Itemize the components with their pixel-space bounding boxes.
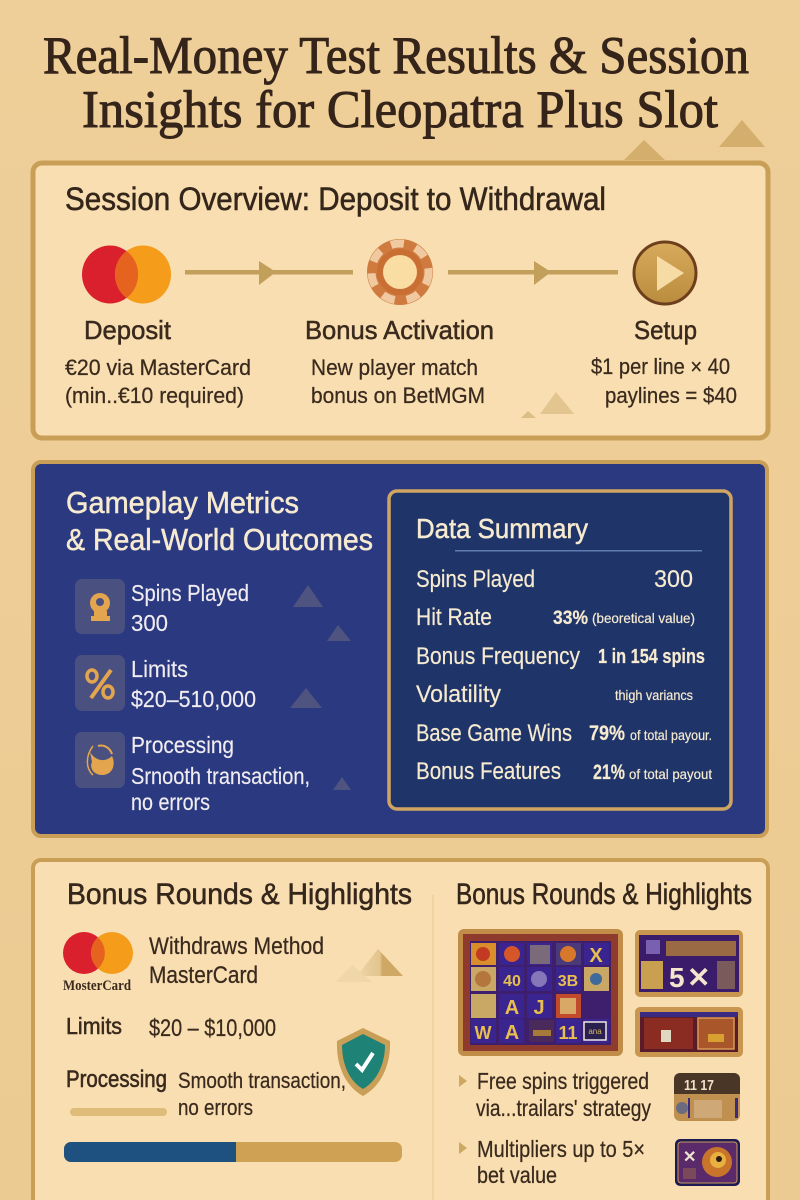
- row: hit rate: (beoretical value): [592, 610, 695, 626]
- icon: shield: [337, 1028, 390, 1096]
- panel: gameplay metrics: [33, 462, 767, 836]
- slot reels image: [458, 929, 623, 1056]
- metric: limits: Limits: [131, 656, 188, 682]
- heading: data summary: Data Summary: [416, 513, 588, 544]
- title: Insights for Cleopatra Plus Slot: [82, 81, 718, 139]
- slot reels image: 3B: [558, 973, 578, 990]
- progress bar: [64, 1142, 402, 1162]
- slot reels image: W: [474, 1023, 492, 1043]
- icon: gear: [75, 579, 125, 634]
- icon: mastercard withdrawal: [63, 932, 133, 994]
- heading: gameplay metrics: Gameplay Metrics: [66, 485, 299, 520]
- slot reels image: 40: [503, 973, 521, 990]
- multiplier thumbnail 5x: [635, 930, 743, 997]
- metric: processing: Processing: [131, 732, 234, 758]
- row: hit rate: [416, 604, 695, 631]
- row: volatility: [416, 681, 693, 708]
- heading: session overview: Session Overview: Deposit to Withdrawal: [65, 181, 606, 217]
- limits row: Limits: [66, 1013, 122, 1039]
- row: spins played: Spins Played: [416, 566, 535, 593]
- bullet: multipliers: [459, 1136, 645, 1188]
- thumbnail: free spins: 11 17: [684, 1077, 714, 1094]
- icon: mastercard deposit: [82, 246, 171, 304]
- metric: processing: Srnooth transaction,: [131, 763, 310, 789]
- metric: limits: [75, 655, 256, 712]
- processing row: Smooth transaction,: [178, 1068, 346, 1093]
- row: base game wins: 79%: [589, 722, 625, 745]
- slot reels image: A: [505, 1022, 519, 1044]
- icon: mastercard withdrawal: MosterCard: [63, 978, 131, 994]
- bullet: free spins: Free spins triggered: [477, 1068, 649, 1094]
- step: setup: paylines = $40: [605, 383, 737, 408]
- panel: session overview: [33, 163, 768, 438]
- step: setup: Setup: [634, 315, 697, 345]
- row: spins played: 300: [654, 566, 693, 593]
- heading: bonus rounds left: Bonus Rounds & Highlights: [67, 878, 412, 911]
- thumbnail: multipliers: [675, 1139, 740, 1186]
- title: Real-Money Test Results & Session: [43, 27, 749, 85]
- arrow: bonus to setup: [448, 261, 618, 285]
- metric: spins played: Spins Played: [131, 580, 249, 606]
- row: bonus features: of total payout: [629, 766, 712, 782]
- step: deposit: €20 via MasterCard: [65, 355, 251, 380]
- step: deposit: (min..€10 required): [65, 383, 244, 408]
- icon: swirl: [75, 732, 125, 788]
- step: setup: [591, 315, 737, 408]
- step: deposit: [65, 315, 251, 408]
- withdrawal method: MasterCard: [149, 962, 258, 989]
- title: [43, 27, 749, 139]
- metric: spins played: 300: [131, 610, 168, 636]
- limits row: [66, 1013, 276, 1042]
- step: bonus activation: Bonus Activation: [305, 315, 494, 345]
- dim pyramids: [290, 585, 351, 790]
- processing row: Processing: [66, 1066, 167, 1093]
- metric: limits: $20–510,000: [131, 686, 256, 712]
- slot reels image: X: [589, 945, 603, 967]
- decorative pyramids: [336, 949, 403, 982]
- heading: gameplay metrics: [66, 485, 373, 557]
- metric: processing: no errors: [131, 789, 210, 815]
- slot reels image: J: [533, 997, 545, 1019]
- icon: percent: [75, 655, 125, 711]
- slot reels image: 11: [558, 1023, 578, 1043]
- arrow: deposit to bonus: [185, 261, 353, 285]
- heading: gameplay metrics: & Real-World Outcomes: [66, 522, 373, 557]
- metric: processing: [75, 732, 310, 815]
- row: base game wins: of total payour.: [630, 727, 712, 743]
- withdrawal method: [149, 933, 324, 989]
- feature thumbnail: [635, 1007, 743, 1057]
- decorative small pyramids: [521, 392, 574, 418]
- row: hit rate: Hit Rate: [416, 604, 492, 631]
- panel: data summary: [389, 491, 731, 809]
- row: bonus frequency: [416, 643, 705, 670]
- step: bonus activation: bonus on BetMGM: [311, 383, 485, 408]
- row: bonus frequency: Bonus Frequency: [416, 643, 580, 670]
- row: base game wins: Base Game Wins: [416, 720, 572, 747]
- bullet: multipliers: bet value: [477, 1162, 557, 1188]
- thumbnail: multipliers: ✕: [683, 1149, 696, 1166]
- slot reels image: A: [505, 997, 519, 1019]
- row: volatility: thigh variancs: [615, 687, 693, 703]
- row: bonus features: Bonus Features: [416, 758, 561, 785]
- bullet: free spins: [459, 1068, 651, 1121]
- bullet: multipliers: Multipliers up to 5×: [477, 1136, 645, 1162]
- step: bonus activation: [305, 315, 494, 408]
- step: bonus activation: New player match: [311, 355, 478, 380]
- row: base game wins: [416, 720, 712, 747]
- row: spins played: [416, 566, 693, 593]
- row: bonus frequency: 1 in 154 spins: [598, 646, 705, 668]
- multiplier thumbnail 5x: ✕: [687, 962, 710, 993]
- icon: casino chip: [367, 239, 433, 305]
- multiplier thumbnail 5x: 5: [669, 962, 685, 993]
- decorative pyramids near title: [624, 120, 765, 160]
- row: volatility: Volatility: [416, 681, 501, 708]
- step: setup: $1 per line × 40: [591, 354, 730, 379]
- row: bonus features: [416, 758, 712, 785]
- withdrawal method: Withdraws Method: [149, 933, 324, 960]
- row: hit rate: 33%: [553, 608, 588, 629]
- bullet: free spins: via...trailars' strategy: [476, 1095, 651, 1121]
- panel: bonus rounds: [33, 860, 768, 1200]
- step: deposit: Deposit: [84, 315, 172, 345]
- icon: play coin: [634, 242, 696, 304]
- processing row: no errors: [178, 1095, 253, 1120]
- limits row: $20 – $10,000: [149, 1015, 276, 1042]
- slot reels image: ana: [588, 1027, 602, 1036]
- metric: spins played: [75, 579, 249, 636]
- processing row: [66, 1066, 346, 1120]
- thumbnail: free spins: [674, 1073, 740, 1121]
- row: bonus features: 21%: [593, 761, 625, 784]
